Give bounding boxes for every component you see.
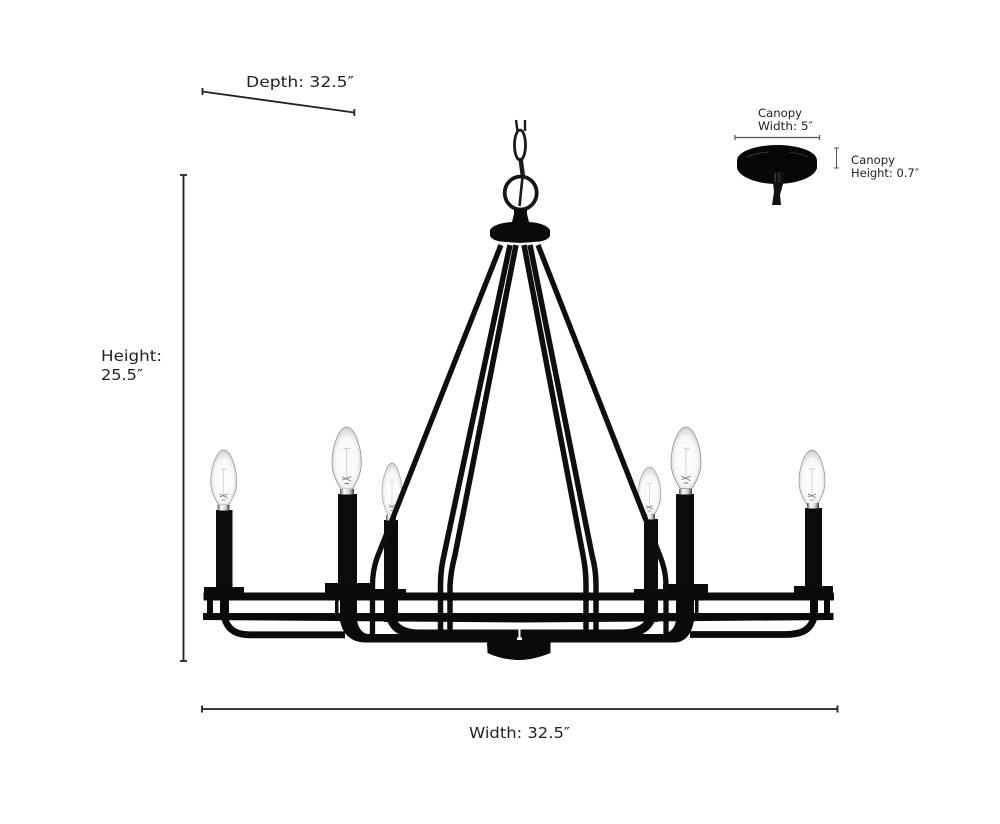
height label: Height: [101, 347, 162, 365]
canopy height label: Canopy [851, 153, 895, 167]
candle sleeves [216, 494, 822, 622]
depth dimension [202, 73, 354, 116]
upper ring [204, 592, 834, 600]
height dimension [101, 175, 187, 661]
width label: Width: 32.5″ [469, 724, 570, 742]
canopy width label: Canopy [758, 106, 802, 120]
canopy height line [834, 148, 839, 168]
canopy detail [735, 106, 920, 205]
bottom bracket [487, 642, 550, 660]
chain [514, 120, 526, 206]
width dimension [202, 706, 838, 742]
width line [202, 706, 838, 712]
canopy height label: Height: 0.7″ [851, 166, 920, 180]
rear lower ring [224, 618, 814, 635]
canopy width label: Width: 5″ [758, 119, 814, 133]
inner candle curves [391, 618, 651, 634]
candle cups [204, 583, 833, 593]
canopy width line [735, 135, 820, 140]
center slit [517, 629, 522, 640]
depth label: Depth: 32.5″ [246, 73, 354, 91]
ring posts [207, 600, 830, 622]
front lower ring [340, 620, 694, 642]
hanging ring [505, 176, 537, 210]
bulbs [211, 427, 825, 515]
chandelier [203, 120, 834, 660]
height label: 25.5″ [101, 366, 143, 384]
middle ring [203, 613, 834, 622]
bulb sockets [218, 489, 819, 520]
canopy plate [737, 145, 817, 205]
arms [372, 245, 666, 636]
depth line [202, 88, 354, 116]
top hub [490, 209, 550, 243]
height line [180, 175, 187, 661]
